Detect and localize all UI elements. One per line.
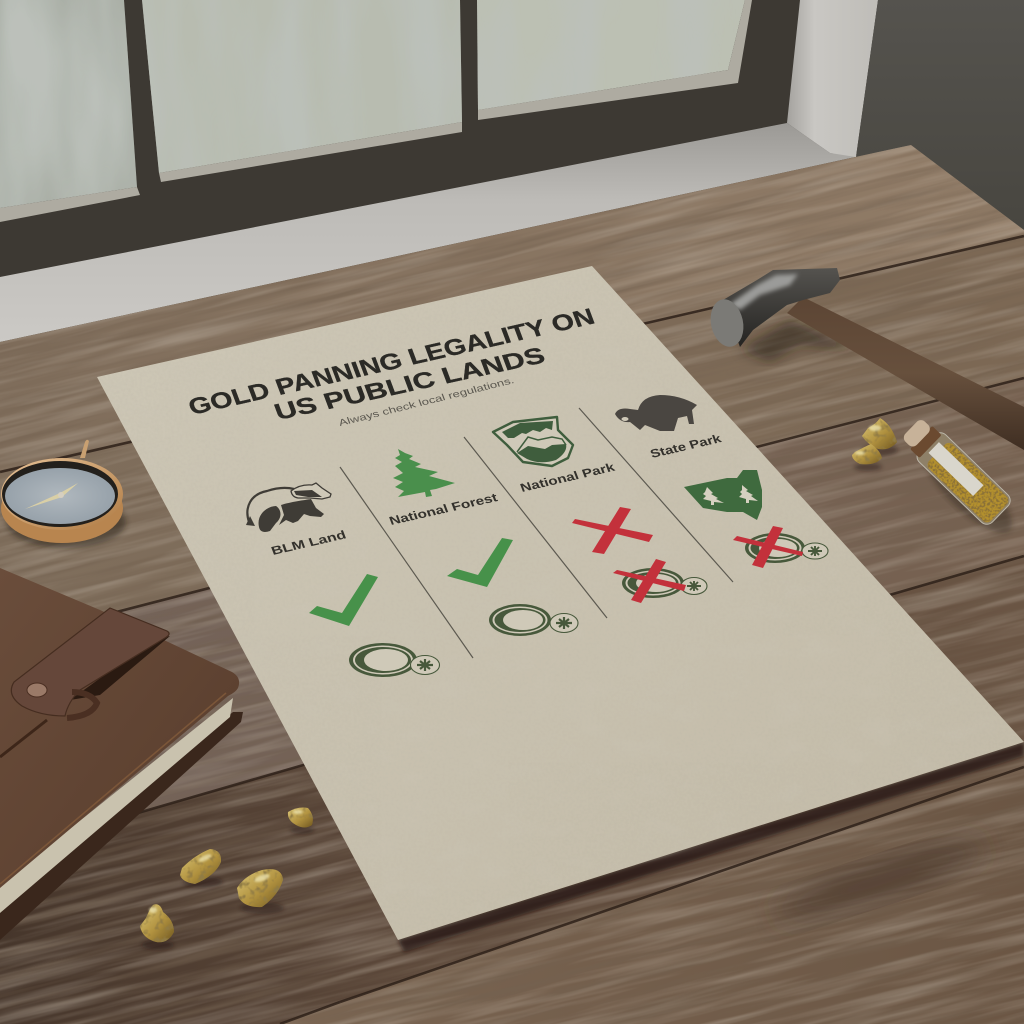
icon: park shield (493, 417, 573, 466)
subtitle: Always check local regulations. (337, 376, 516, 429)
icon: gold pan crossed out (613, 559, 707, 603)
panel: paper poster (90, 260, 1024, 950)
icon: badger (246, 483, 331, 532)
title: GOLD PANNING LEGALITY ON (185, 304, 598, 420)
icon: green check (309, 574, 378, 626)
label: National Forest: National Forest (387, 490, 500, 528)
icon: gold pan (489, 604, 578, 636)
sill (0, 123, 911, 342)
dark knot patches on front plank (769, 825, 991, 935)
icon: hammer (706, 268, 1024, 450)
icon: green check (447, 538, 513, 587)
title: US PUBLIC LANDS (271, 343, 549, 425)
dark wall (856, 0, 1024, 232)
column: BLM Land (246, 483, 440, 677)
column: State Park (615, 395, 828, 568)
icon: compass (1, 440, 126, 548)
window glass (0, 0, 745, 208)
icon: gold pan crossed out (733, 526, 828, 568)
label: State Park: State Park (648, 431, 724, 461)
label: National Park: National Park (518, 460, 617, 495)
icon: glass vial of gold (898, 414, 1024, 545)
label: BLM Land: BLM Land (269, 528, 348, 558)
gold nuggets (140, 418, 898, 950)
column: National Forest (387, 449, 578, 636)
icon: state shape with trees (684, 470, 762, 520)
background: window and wall (0, 0, 1024, 345)
icon: bison (615, 395, 697, 431)
icon: pine tree (393, 449, 455, 497)
icon: red cross (572, 507, 653, 554)
strap (11, 608, 169, 716)
column: National Park (493, 417, 707, 603)
strap shadow (70, 636, 170, 700)
icon: leather notebook (0, 568, 243, 940)
paper shadow (398, 742, 1024, 952)
light wall reveal (787, 0, 878, 157)
icon: gold pan (349, 643, 440, 677)
column dividers (340, 408, 733, 658)
